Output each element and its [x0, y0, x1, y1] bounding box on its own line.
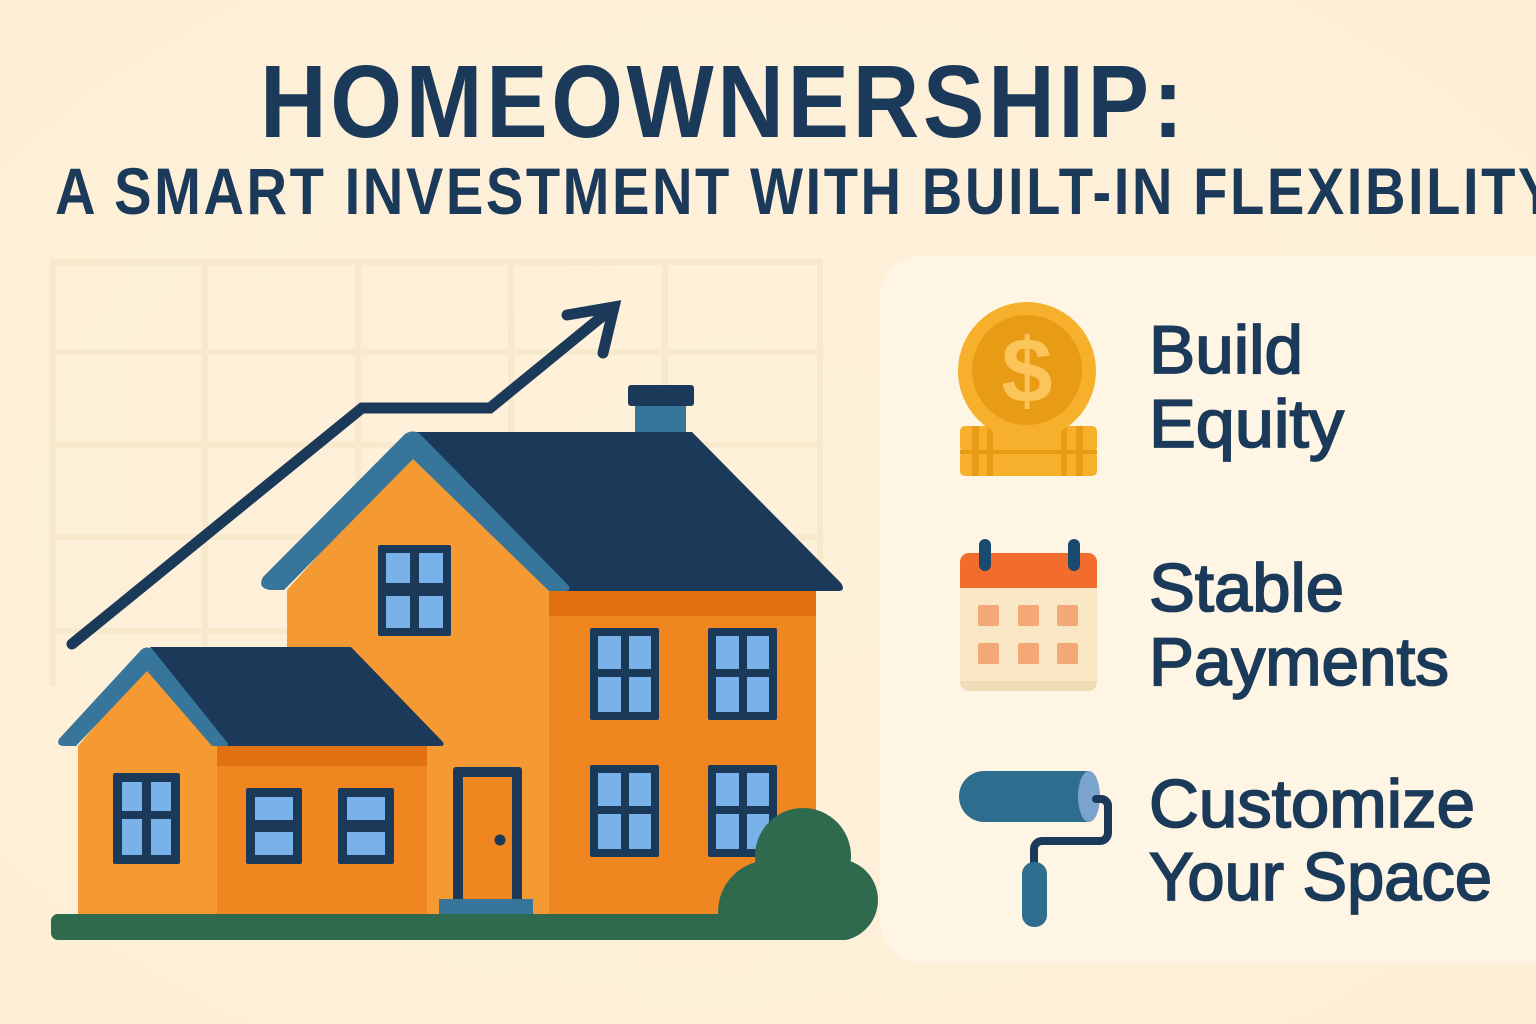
label: build equity: Equity [1149, 386, 1344, 462]
left wing wall [217, 746, 427, 914]
house illustration [51, 385, 878, 964]
benefit: stable payments [960, 539, 1449, 700]
left roof [150, 647, 444, 746]
upper window [378, 545, 451, 636]
bush [718, 808, 878, 940]
label: stable payments [1149, 550, 1449, 700]
chimney [628, 385, 694, 436]
benefit: customize your space [959, 766, 1492, 927]
label: customize your space [1149, 766, 1492, 915]
growth arrow [72, 307, 614, 644]
main gable fascia [261, 432, 570, 591]
wing window top left [590, 628, 659, 720]
wing window bottom left [590, 765, 659, 857]
wing window right [338, 788, 394, 864]
icon: calendar [960, 539, 1097, 691]
label: customize your space: Customize [1149, 766, 1475, 842]
icon: coin stack: $ [1001, 320, 1053, 422]
label: customize your space: Your Space [1149, 839, 1492, 915]
right wing wall [549, 591, 816, 914]
wing window bottom right [708, 765, 777, 857]
front door [453, 767, 522, 903]
benefit: build equity [958, 302, 1344, 476]
right wing eave shadow [549, 591, 816, 616]
left gable wall [78, 664, 217, 914]
main roof [416, 432, 843, 591]
main gable wall [287, 450, 549, 914]
wing window left [246, 788, 302, 864]
title [55, 44, 1536, 228]
left wing eave shadow [217, 746, 427, 766]
ground [51, 914, 831, 940]
left window [113, 773, 180, 864]
door step [439, 899, 533, 914]
label: build equity: Build [1149, 312, 1303, 388]
panel: benefits [880, 256, 1536, 963]
icon: paint roller [959, 771, 1108, 927]
left gable fascia [58, 648, 228, 746]
wing window top right [708, 628, 777, 720]
label: stable payments: Payments [1149, 624, 1449, 700]
label: stable payments: Stable [1149, 550, 1344, 626]
heading: homeownership: HOMEOWNERSHIP: [260, 44, 1187, 159]
label: build equity [1149, 312, 1344, 462]
background chart grid [50, 259, 823, 686]
icon: coin stack [958, 302, 1097, 476]
